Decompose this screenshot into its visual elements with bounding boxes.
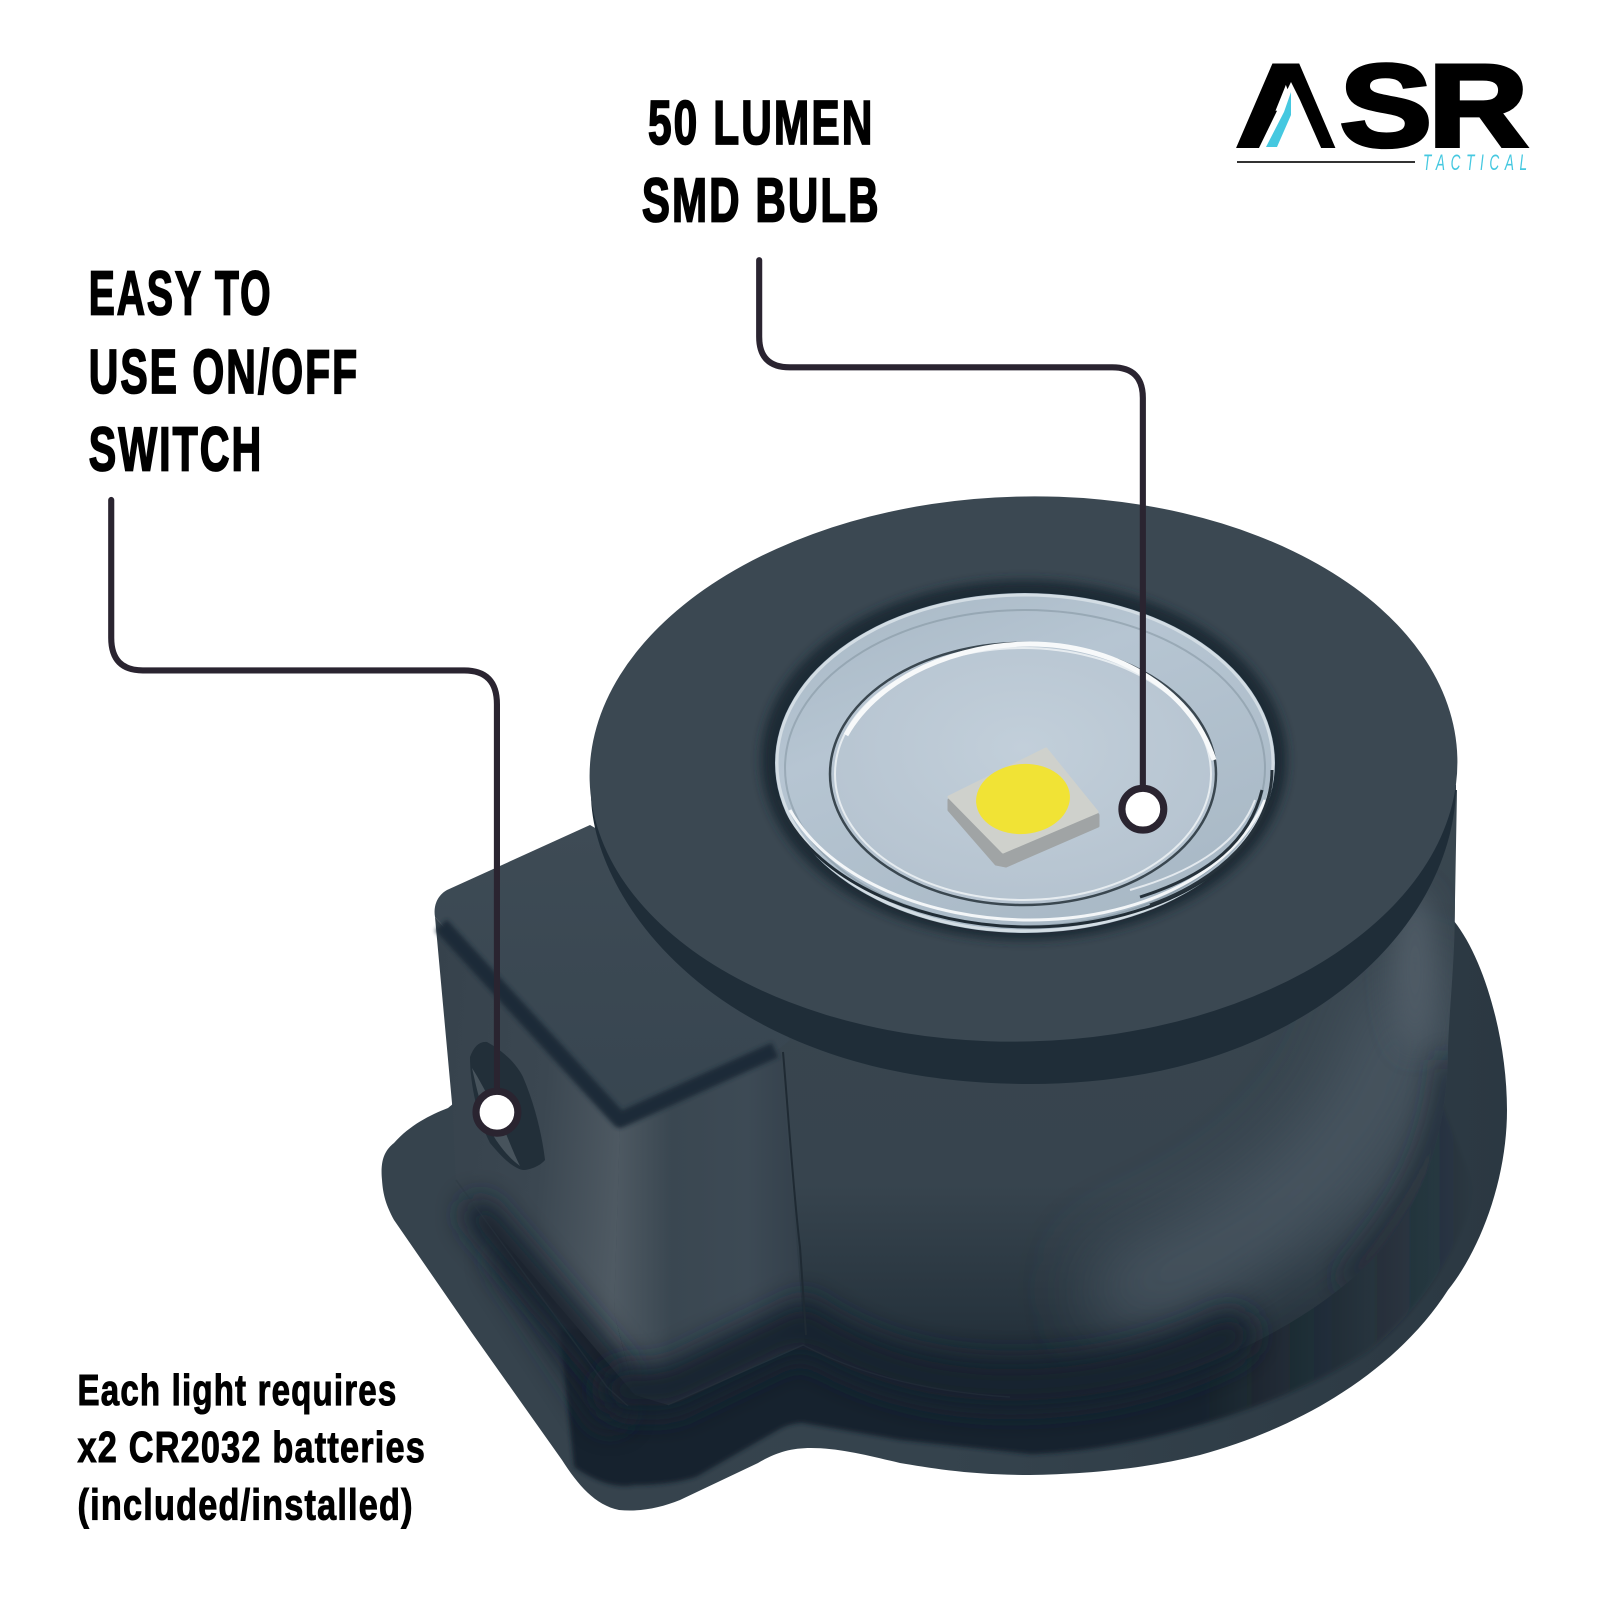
inner lens rims [830, 643, 1216, 905]
box front face [614, 1048, 805, 1405]
product: light housing [382, 485, 1507, 1511]
inner lens [830, 643, 1216, 905]
logo accent: cyan blade [1258, 82, 1322, 150]
seam line [783, 1052, 806, 1335]
note: batteries: Each light requires [78, 1366, 397, 1415]
cylinder wall [610, 790, 1457, 1397]
heading: easy to use switch [89, 259, 359, 484]
logo: ASR Tactical [1236, 41, 1528, 175]
box top dark edge [441, 925, 775, 1120]
callout marker: bulb [1122, 788, 1164, 830]
switch button [470, 1042, 545, 1170]
callout line: bulb [759, 260, 1164, 830]
heading: easy to use switch: SWITCH [89, 415, 263, 484]
wall highlights [1130, 890, 1450, 1290]
callout marker: switch [476, 1091, 518, 1133]
box top [435, 825, 790, 1125]
heading: easy to use switch: EASY TO [89, 259, 272, 328]
outer lens [775, 593, 1275, 933]
heading: 50 lumen SMD bulb: 50 LUMEN [648, 89, 874, 158]
dark bevel of top ring [591, 785, 1456, 1084]
LED emitter [973, 760, 1073, 838]
flange dark recess [560, 1100, 1475, 1486]
heading: easy to use switch: USE ON/OFF [89, 338, 359, 407]
lens recess shadow [761, 580, 1287, 940]
note: batteries: x2 CR2032 batteries [78, 1423, 426, 1472]
top flat ring [583, 485, 1464, 1053]
box left face [435, 917, 635, 1395]
base shadow around box and wall [480, 1215, 1230, 1390]
outer lens rims [777, 595, 1273, 931]
logo tagline: TACTICAL [1423, 150, 1527, 175]
note: batteries [78, 1366, 426, 1529]
flange ridge line [456, 1180, 1010, 1406]
heading: 50 lumen SMD bulb [642, 89, 881, 235]
callout line: switch [111, 500, 518, 1133]
logo rule [1237, 161, 1415, 163]
flange left shading [510, 1260, 610, 1410]
logo wordmark: ASR [1236, 41, 1528, 172]
lens assembly [761, 580, 1287, 940]
flange base plate [382, 900, 1507, 1511]
LED package [949, 749, 1098, 866]
heading: 50 lumen SMD bulb: SMD BULB [642, 166, 881, 235]
switch button lighter face [472, 1068, 520, 1166]
note: batteries: (included/installed) [78, 1480, 414, 1529]
